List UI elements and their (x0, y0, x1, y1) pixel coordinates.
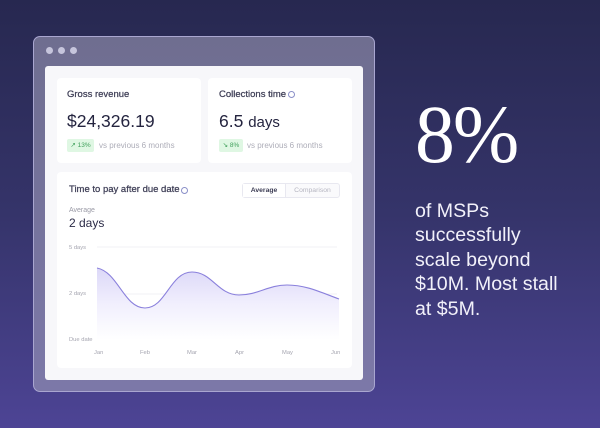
badge: down 8% (219, 139, 243, 152)
icon: info (288, 91, 295, 98)
statistic description: $10M. Most stall (415, 273, 558, 295)
value: gross revenue: $24,326.19 (67, 111, 155, 131)
x-axis label: Apr: Apr (235, 350, 244, 356)
x-axis label: Feb: Feb (140, 350, 150, 356)
label: average: Average (69, 207, 95, 214)
value: collections time: 6.5 days (219, 111, 280, 131)
icon: info (181, 187, 188, 194)
badge: up 13%: ↗ 13% (70, 142, 91, 149)
big statistic: 8%: 8% (415, 88, 517, 180)
card: gross revenue (57, 78, 201, 163)
statistic description: of MSPs (415, 200, 489, 222)
x-axis label: Jun: Jun (331, 350, 340, 356)
toggle option: comparison: Comparison (294, 187, 331, 194)
x-axis label: Mar: Mar (187, 350, 197, 356)
x-axis label: May: May (282, 350, 293, 356)
toggle option: average: Average (251, 187, 277, 194)
card: time to pay chart (57, 172, 352, 368)
heading: collections time: Collections time (219, 89, 286, 100)
y-axis label: 5 days: 5 days (69, 245, 86, 251)
y-axis label: due date: Due date (69, 337, 93, 343)
comparison text: collections: vs previous 6 months (247, 141, 323, 150)
badge: down 8%: ↘ 8% (223, 142, 239, 149)
heading: gross revenue: Gross revenue (67, 89, 129, 100)
statistic description (415, 200, 558, 320)
statistic description: scale beyond (415, 249, 530, 271)
statistic description: at $5M. (415, 298, 480, 320)
statistic description: successfully (415, 224, 521, 246)
toggle option: average (243, 184, 286, 197)
value: average days: 2 days (69, 216, 104, 230)
card: collections time (208, 78, 352, 163)
comparison text: revenue: vs previous 6 months (99, 141, 175, 150)
window control dots (46, 47, 77, 54)
heading: time to pay: Time to pay after due date (69, 184, 180, 195)
browser window panel (33, 36, 375, 392)
x-axis label: Jan: Jan (94, 350, 103, 356)
toggle: average or comparison (242, 183, 340, 198)
badge: up 13% (67, 139, 94, 152)
y-axis label: 2 days: 2 days (69, 291, 86, 297)
dashboard panel (45, 66, 363, 380)
